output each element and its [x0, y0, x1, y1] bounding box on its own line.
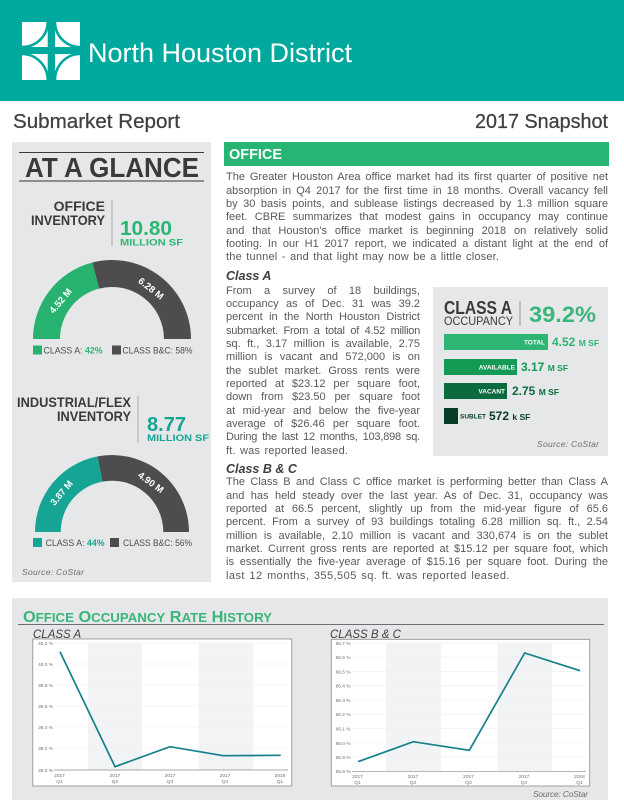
- chart: class a occupancy line: Q2: [112, 779, 119, 785]
- chart: class b and c occupancy line: Q2: [410, 780, 417, 786]
- chart: class b and c occupancy line: 2018: [574, 774, 585, 780]
- source note: Source: CoStar: [537, 439, 600, 449]
- chart: class b and c occupancy line: 66.1 %: [336, 727, 351, 733]
- chart: industrial inventory gauge: 4.90 M: [135, 470, 166, 496]
- text block: office intro: The Greater Houston Area office market had its first quarter of positive net: [226, 171, 608, 183]
- text block: office intro: feet. CBRE summarizes that modest gains in occupancy may continue: [226, 211, 608, 223]
- panel: class a occupancy: [433, 287, 608, 456]
- industrial inventory label: [17, 394, 138, 443]
- chart: class b and c occupancy line: 2017: [352, 774, 363, 780]
- text block: class a: down from $23.50 per square foot: [226, 391, 420, 403]
- chart: class b and c occupancy line: [331, 639, 590, 786]
- text block: class b and c: last 12 months, 355,505 sq. ft. was reported leased.: [226, 570, 510, 582]
- bar: vacant: 2.75 M SF: [512, 384, 559, 398]
- header banner: [0, 0, 624, 101]
- chart: class a occupancy line: 40.0 %: [38, 662, 54, 668]
- snapshot label: 2017 Snapshot: [475, 111, 608, 133]
- chart: class a occupancy line: 2017: [54, 773, 65, 779]
- bar: total: TOTAL: [524, 340, 545, 346]
- chart: class a occupancy line: 40.2 %: [38, 641, 54, 647]
- chart: class b and c occupancy line: Q1: [354, 780, 361, 786]
- text block: class b and c: and has held steady over the last year. As of Dec. 31, occupancy was: [226, 490, 608, 502]
- chart: class b and c occupancy line: Q1: [576, 780, 583, 786]
- chart: class b and c occupancy line: 66.3 %: [336, 698, 351, 704]
- text block: office intro: footing. In our H1 2017 report, we indicated a distant light at the end of: [226, 238, 608, 250]
- occupancy heading: CLASS A: [444, 298, 512, 318]
- chart: class a occupancy line: Q3: [167, 779, 174, 785]
- heading: at a glance: AT A GLANCE: [25, 152, 199, 183]
- text block: class b and c: [226, 476, 608, 582]
- industrial inventory value: 8.77: [147, 414, 186, 436]
- bar: sublet: 572 k SF: [489, 409, 530, 423]
- text block: class b and c: market. Current gross rents are reported at $15.12 per square foot, which: [226, 543, 608, 555]
- office inventory label: OFFICE: [54, 198, 105, 214]
- office inventory value: MILLION SF: [120, 238, 183, 249]
- chart: office inventory gauge: 4.52 M: [48, 287, 75, 316]
- chart: class b and c occupancy line: 65.9 %: [336, 755, 351, 761]
- chart: industrial inventory gauge: 3.87 M: [49, 479, 76, 508]
- chart: class a occupancy line: 39.6 %: [38, 704, 54, 710]
- chart: class a occupancy line: 39.0 %: [38, 768, 54, 774]
- text block: class a: occupancy as of Dec. 31 was 39.2: [226, 298, 420, 310]
- panel: occupancy rate history: [12, 598, 608, 800]
- report title: Submarket Report: [13, 111, 180, 133]
- bar: sublet: [444, 408, 530, 424]
- chart: class a occupancy line: 2017: [220, 773, 231, 779]
- chart: office inventory gauge: [33, 260, 191, 339]
- panel: at a glance: [12, 142, 211, 582]
- text block: class a: million is vacant and 572,000 is on: [226, 351, 420, 363]
- chart: class b and c occupancy line: 66.2 %: [336, 712, 351, 718]
- office section heading: OFFICE: [229, 146, 282, 163]
- icon: district logo: [22, 22, 80, 80]
- bar: available: [444, 359, 568, 375]
- district name: North Houston District: [88, 38, 352, 68]
- chart: class b and c occupancy line: 65.8 %: [336, 769, 351, 775]
- office inventory label: [31, 198, 112, 246]
- text block: class b and c: million is available, 2.10 million is vacant and 330,674 is on the sublet: [226, 530, 608, 542]
- text block: office intro: absorption in Q4 2017 for the first time in 18 months. Overall vacancy fell: [226, 185, 608, 197]
- source note: Source: CoStar: [22, 567, 85, 577]
- text block: class a: the sublet market. Gross rents were: [226, 365, 420, 377]
- chart: class a occupancy line: 39.8 %: [38, 683, 54, 689]
- chart: class a occupancy line: Q4: [222, 779, 229, 785]
- chart: class a occupancy line: 2017: [110, 773, 121, 779]
- text block: class a: sq. ft., 3.17 million is available, 2.75: [226, 338, 420, 350]
- office inventory value: 10.80: [120, 218, 172, 240]
- bar: available: 3.17 M SF: [521, 360, 568, 374]
- legend: office inventory: [33, 346, 192, 356]
- bar: sublet: SUBLET: [460, 414, 486, 420]
- office inventory label: INVENTORY: [31, 212, 106, 228]
- industrial inventory value: [147, 414, 209, 444]
- text block: office intro: the tunnel - and that light may now be a little closer.: [226, 251, 499, 263]
- occupancy heading: OCCUPANCY: [444, 314, 513, 328]
- class b and c subheading: Class B & C: [226, 462, 298, 476]
- chart: class a occupancy line: 39.4 %: [38, 725, 54, 731]
- text block: class b and c: is essentially the five-year average of $15.16 per square foot. During the: [226, 556, 608, 568]
- text block: class a: submarket. From a total of 4.52 million: [226, 325, 420, 337]
- chart: class b and c occupancy line: 2017: [519, 774, 530, 780]
- text block: office intro: [226, 171, 608, 263]
- chart: class b and c occupancy line: 66.6 %: [336, 655, 351, 661]
- industrial inventory value: MILLION SF: [147, 433, 209, 444]
- bar: vacant: [444, 383, 559, 399]
- office inventory value: [120, 218, 183, 249]
- legend: office inventory: CLASS A: 42%: [44, 346, 102, 356]
- occupancy heading: 39.2%: [529, 302, 596, 327]
- text block: class a: [226, 285, 420, 457]
- heading: occupancy rate history: OFFICE OCCUPANCY RATE HISTORY: [23, 609, 272, 626]
- text block: class a: During the last 12 months, 103,898 sq.: [226, 431, 420, 443]
- text block: office intro: and that Houston's office market is beginning 2018 on relatively solid: [226, 225, 608, 237]
- chart: class a occupancy line: Q1: [56, 779, 63, 785]
- industrial inventory label: INDUSTRIAL/FLEX: [17, 394, 132, 410]
- chart: class b and c occupancy line: 66.4 %: [336, 684, 351, 690]
- bar: available: AVAILABLE: [479, 364, 516, 372]
- chart: class a occupancy line: [33, 639, 292, 786]
- chart: industrial inventory gauge: [35, 455, 189, 532]
- legend: office inventory: CLASS B&C: 58%: [122, 346, 192, 356]
- chart: class b and c occupancy line: 66.0 %: [336, 741, 351, 747]
- bar: vacant: VACANT: [478, 388, 505, 396]
- chart: class b and c occupancy line: Q4: [521, 780, 528, 786]
- text block: class b and c: percent. From a survey of 93 buildings totaling 6.28 million sq. ft., 2.54: [226, 516, 608, 528]
- legend: industrial inventory: [33, 538, 192, 548]
- legend: industrial inventory: CLASS B&C: 56%: [123, 538, 192, 548]
- text block: class b and c: The Class B and Class C office market is performing better than Class A: [226, 476, 608, 488]
- legend: industrial inventory: CLASS A: 44%: [46, 538, 104, 548]
- text block: class a: ft. was reported leased.: [226, 445, 348, 457]
- bar: total: 4.52 M SF: [552, 335, 599, 349]
- chart: class a occupancy line: 2017: [165, 773, 176, 779]
- chart: class a occupancy line: 2018: [275, 773, 286, 779]
- text block: office intro: by 30 basis points, and sublease listings decreased by 1.3 million square: [226, 198, 608, 210]
- class a chart title: CLASS A: [33, 629, 81, 641]
- chart: class b and c occupancy line: Q3: [465, 780, 472, 786]
- text block: class a: percent in the North Houston District: [226, 311, 420, 323]
- text block: class a: reported at $23.12 per square foot,: [226, 378, 420, 390]
- chart: class b and c occupancy line: 2017: [408, 774, 419, 780]
- chart: class a occupancy line: 39.2 %: [38, 746, 54, 752]
- source note: Source: CoStar: [533, 789, 589, 799]
- occupancy heading: [444, 298, 596, 328]
- text block: class a: average of $26.46 per square foot.: [226, 418, 420, 430]
- chart: class b and c occupancy line: 66.5 %: [336, 670, 351, 676]
- office section heading: [224, 142, 609, 166]
- text block: class a: at mid-year and below the five-year: [226, 405, 420, 417]
- chart: class b and c occupancy line: 2017: [463, 774, 474, 780]
- class a subheading: Class A: [226, 269, 271, 283]
- bar: total: [444, 334, 599, 350]
- industrial inventory label: INVENTORY: [57, 408, 132, 424]
- class b and c chart title: CLASS B & C: [330, 629, 402, 641]
- chart: class a occupancy line: Q1: [277, 779, 284, 785]
- text block: class a: From a survey of 18 buildings,: [226, 285, 420, 297]
- chart: office inventory gauge: 6.28 M: [136, 276, 165, 302]
- text block: class b and c: reported at 66.5 percent, slightly up from the mid-year figure of 65.6: [226, 503, 608, 515]
- chart: class b and c occupancy line: 66.7 %: [336, 641, 351, 647]
